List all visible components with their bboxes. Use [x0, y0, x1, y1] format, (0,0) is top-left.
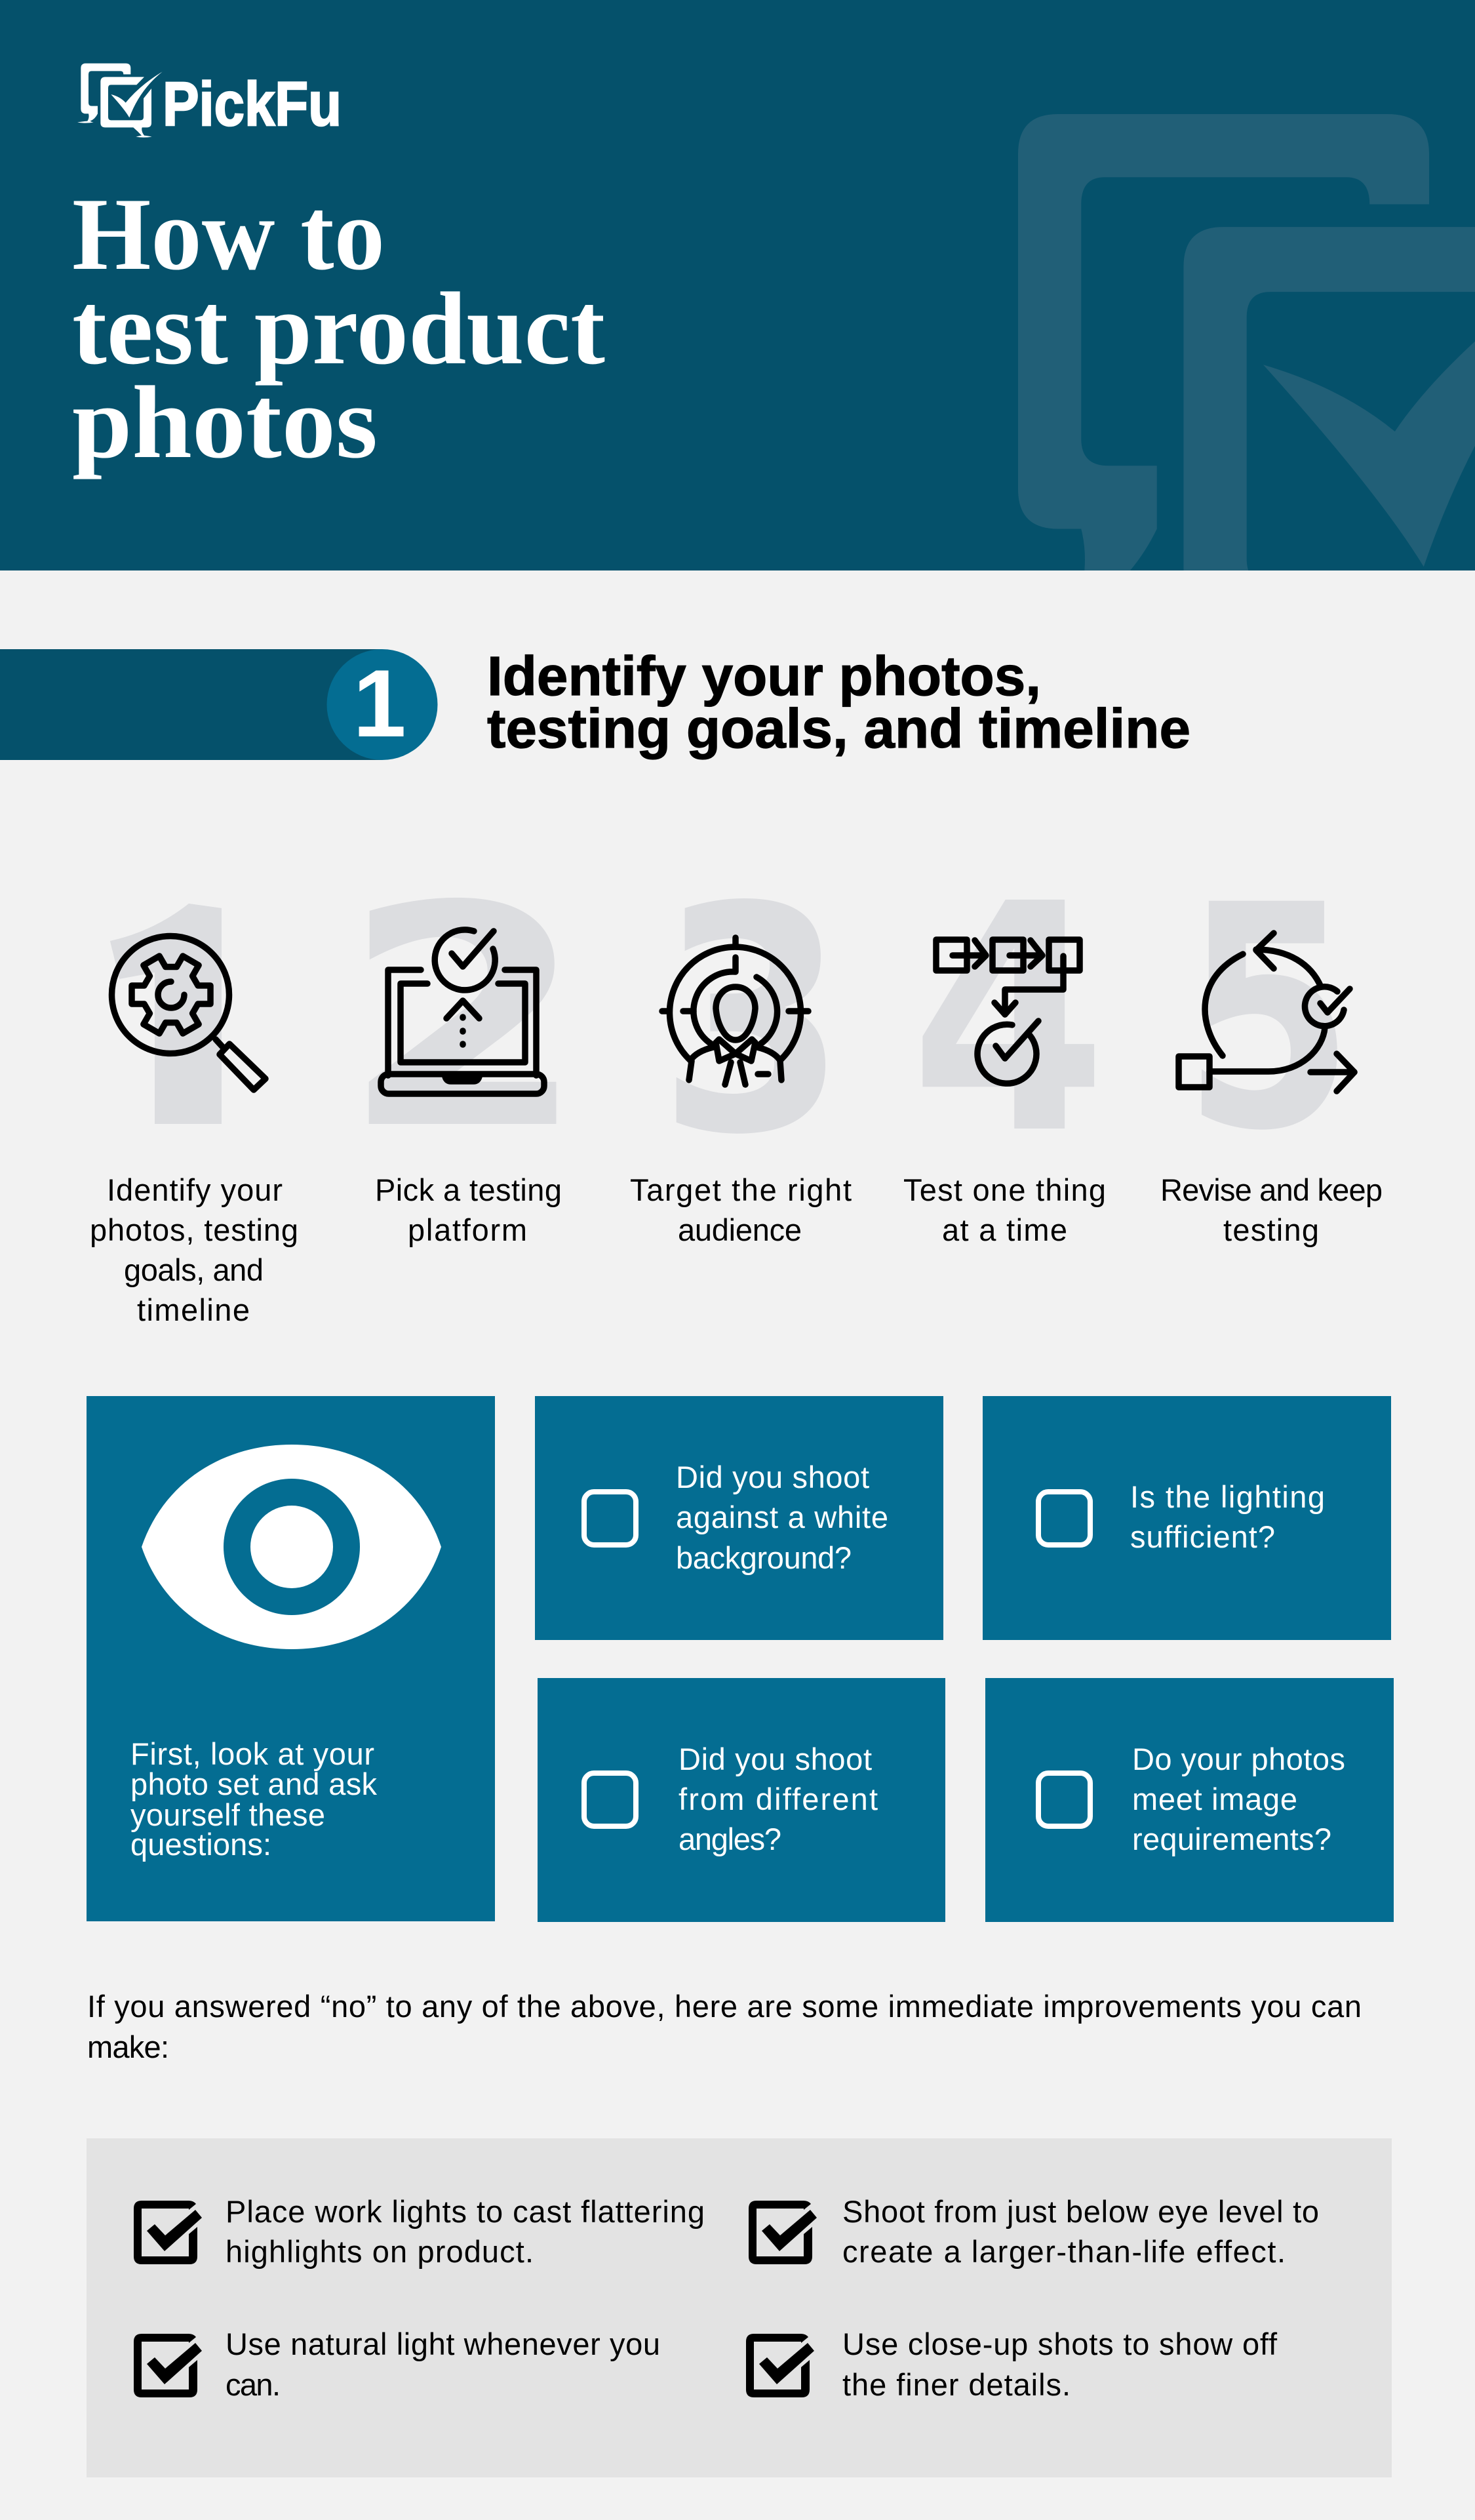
step 1 label	[90, 1172, 298, 1327]
title: How to	[72, 177, 385, 292]
item text	[226, 2194, 705, 2269]
step 1: identify	[92, 904, 296, 1321]
icon: magnifier with gear	[111, 936, 266, 1090]
first look text: questions:	[130, 1827, 271, 1862]
question text: Did you shoot	[676, 1460, 869, 1494]
panel: angles question	[538, 1678, 945, 1922]
step 4 label	[903, 1172, 1106, 1247]
big numeral 4: 4	[910, 837, 1107, 1203]
section heading	[487, 645, 1190, 759]
panel: white background question	[535, 1396, 943, 1640]
step 2: platform	[341, 841, 587, 1247]
question text: Do your photos	[1132, 1742, 1345, 1776]
intro paragraph: make:	[87, 2030, 169, 2064]
step 5: revise	[1160, 840, 1383, 1247]
icon: laptop with check	[381, 930, 544, 1094]
item text: the finer details.	[842, 2367, 1071, 2402]
step 4: one thing	[903, 837, 1107, 1247]
question text	[678, 1742, 878, 1856]
step 3 label: Target the right	[630, 1172, 852, 1207]
icon: checked box	[746, 2334, 814, 2397]
item text	[842, 2194, 1319, 2269]
question text: from different	[678, 1782, 878, 1816]
question text: sufficient?	[1130, 1519, 1275, 1554]
panel: improvements	[87, 2138, 1392, 2477]
checkbox	[1038, 1492, 1090, 1545]
item text: Place work lights to cast flattering	[226, 2194, 705, 2229]
icon: target with person	[662, 938, 808, 1085]
item: natural light	[134, 2327, 660, 2402]
question text: requirements?	[1132, 1822, 1331, 1856]
first look text: First, look at your	[130, 1736, 374, 1771]
icon: checked box	[134, 2334, 202, 2397]
item text: highlights on product.	[226, 2234, 534, 2269]
logo mark	[77, 64, 163, 138]
icon: checked box	[134, 2201, 202, 2264]
question text	[1132, 1742, 1345, 1856]
title: photos	[72, 365, 378, 480]
item: eye level	[749, 2194, 1319, 2269]
panel: first look	[87, 1396, 495, 1921]
step 5 label: testing	[1223, 1212, 1319, 1247]
logo: PickFu	[77, 64, 342, 139]
step 5 label	[1160, 1172, 1383, 1247]
logo wordmark: PickFu	[163, 70, 342, 139]
step 1 label: timeline	[137, 1292, 250, 1327]
header panel	[0, 0, 1475, 570]
first look text: yourself these	[130, 1797, 325, 1832]
question text: meet image	[1132, 1782, 1297, 1816]
big numeral 5: 5	[1183, 840, 1354, 1198]
first look text	[130, 1736, 378, 1862]
item text: Shoot from just below eye level to	[842, 2194, 1319, 2229]
item text: create a larger-than-life effect.	[842, 2234, 1286, 2269]
question text	[676, 1460, 888, 1575]
item text	[226, 2327, 660, 2402]
panel: image requirements question	[985, 1678, 1394, 1922]
section 1 banner	[0, 645, 1190, 760]
step 2 label	[375, 1172, 562, 1247]
number badge	[326, 649, 438, 760]
big numeral 1: 1	[66, 841, 320, 1196]
section heading: Identify your photos,	[487, 645, 1041, 707]
step 1 label: photos, testing	[90, 1212, 298, 1247]
question text: Is the lighting	[1130, 1479, 1325, 1514]
icon: eye	[142, 1445, 441, 1649]
title: test product	[72, 271, 605, 386]
intro paragraph	[87, 1989, 1362, 2064]
question text: Did you shoot	[678, 1742, 872, 1776]
watermark logo	[1018, 114, 1475, 570]
question text: angles?	[678, 1822, 781, 1856]
checkbox	[584, 1773, 636, 1826]
question text: against a white	[676, 1500, 888, 1534]
panel: lighting question	[983, 1396, 1391, 1640]
item text: Use close-up shots to show off	[842, 2327, 1278, 2361]
question text: background?	[676, 1540, 852, 1575]
item text	[842, 2327, 1278, 2402]
step 3: audience	[630, 841, 852, 1247]
intro paragraph: If you answered “no” to any of the above, here are some immediate improvements you can	[87, 1989, 1362, 2024]
step 4 label: at a time	[942, 1212, 1067, 1247]
number badge: 1	[353, 650, 406, 757]
item text: Use natural light whenever you	[226, 2327, 660, 2361]
big numeral 3: 3	[658, 841, 847, 1203]
icon: revise loop	[1179, 933, 1354, 1091]
section heading: testing goals, and timeline	[487, 698, 1190, 759]
step 1 label: goals, and	[124, 1252, 264, 1287]
step 1 label: Identify your	[107, 1172, 283, 1207]
checkbox	[584, 1492, 636, 1545]
step 2 label: Pick a testing	[375, 1172, 562, 1207]
question text	[1130, 1479, 1325, 1554]
step 3 label: audience	[678, 1212, 802, 1247]
item: close-up	[746, 2327, 1278, 2402]
big numeral 2: 2	[341, 841, 587, 1196]
title	[72, 177, 605, 480]
step 2 label: platform	[408, 1212, 527, 1247]
checkbox	[1038, 1773, 1090, 1826]
icon: flow with check	[936, 940, 1080, 1083]
first look text: photo set and ask	[130, 1767, 378, 1801]
step 3 label	[630, 1172, 852, 1247]
icon: checked box	[749, 2201, 817, 2264]
step 5 label: Revise and keep	[1160, 1172, 1383, 1207]
item text: can.	[226, 2367, 281, 2402]
step 4 label: Test one thing	[903, 1172, 1106, 1207]
banner bar	[0, 649, 382, 760]
item: work lights	[134, 2194, 705, 2269]
